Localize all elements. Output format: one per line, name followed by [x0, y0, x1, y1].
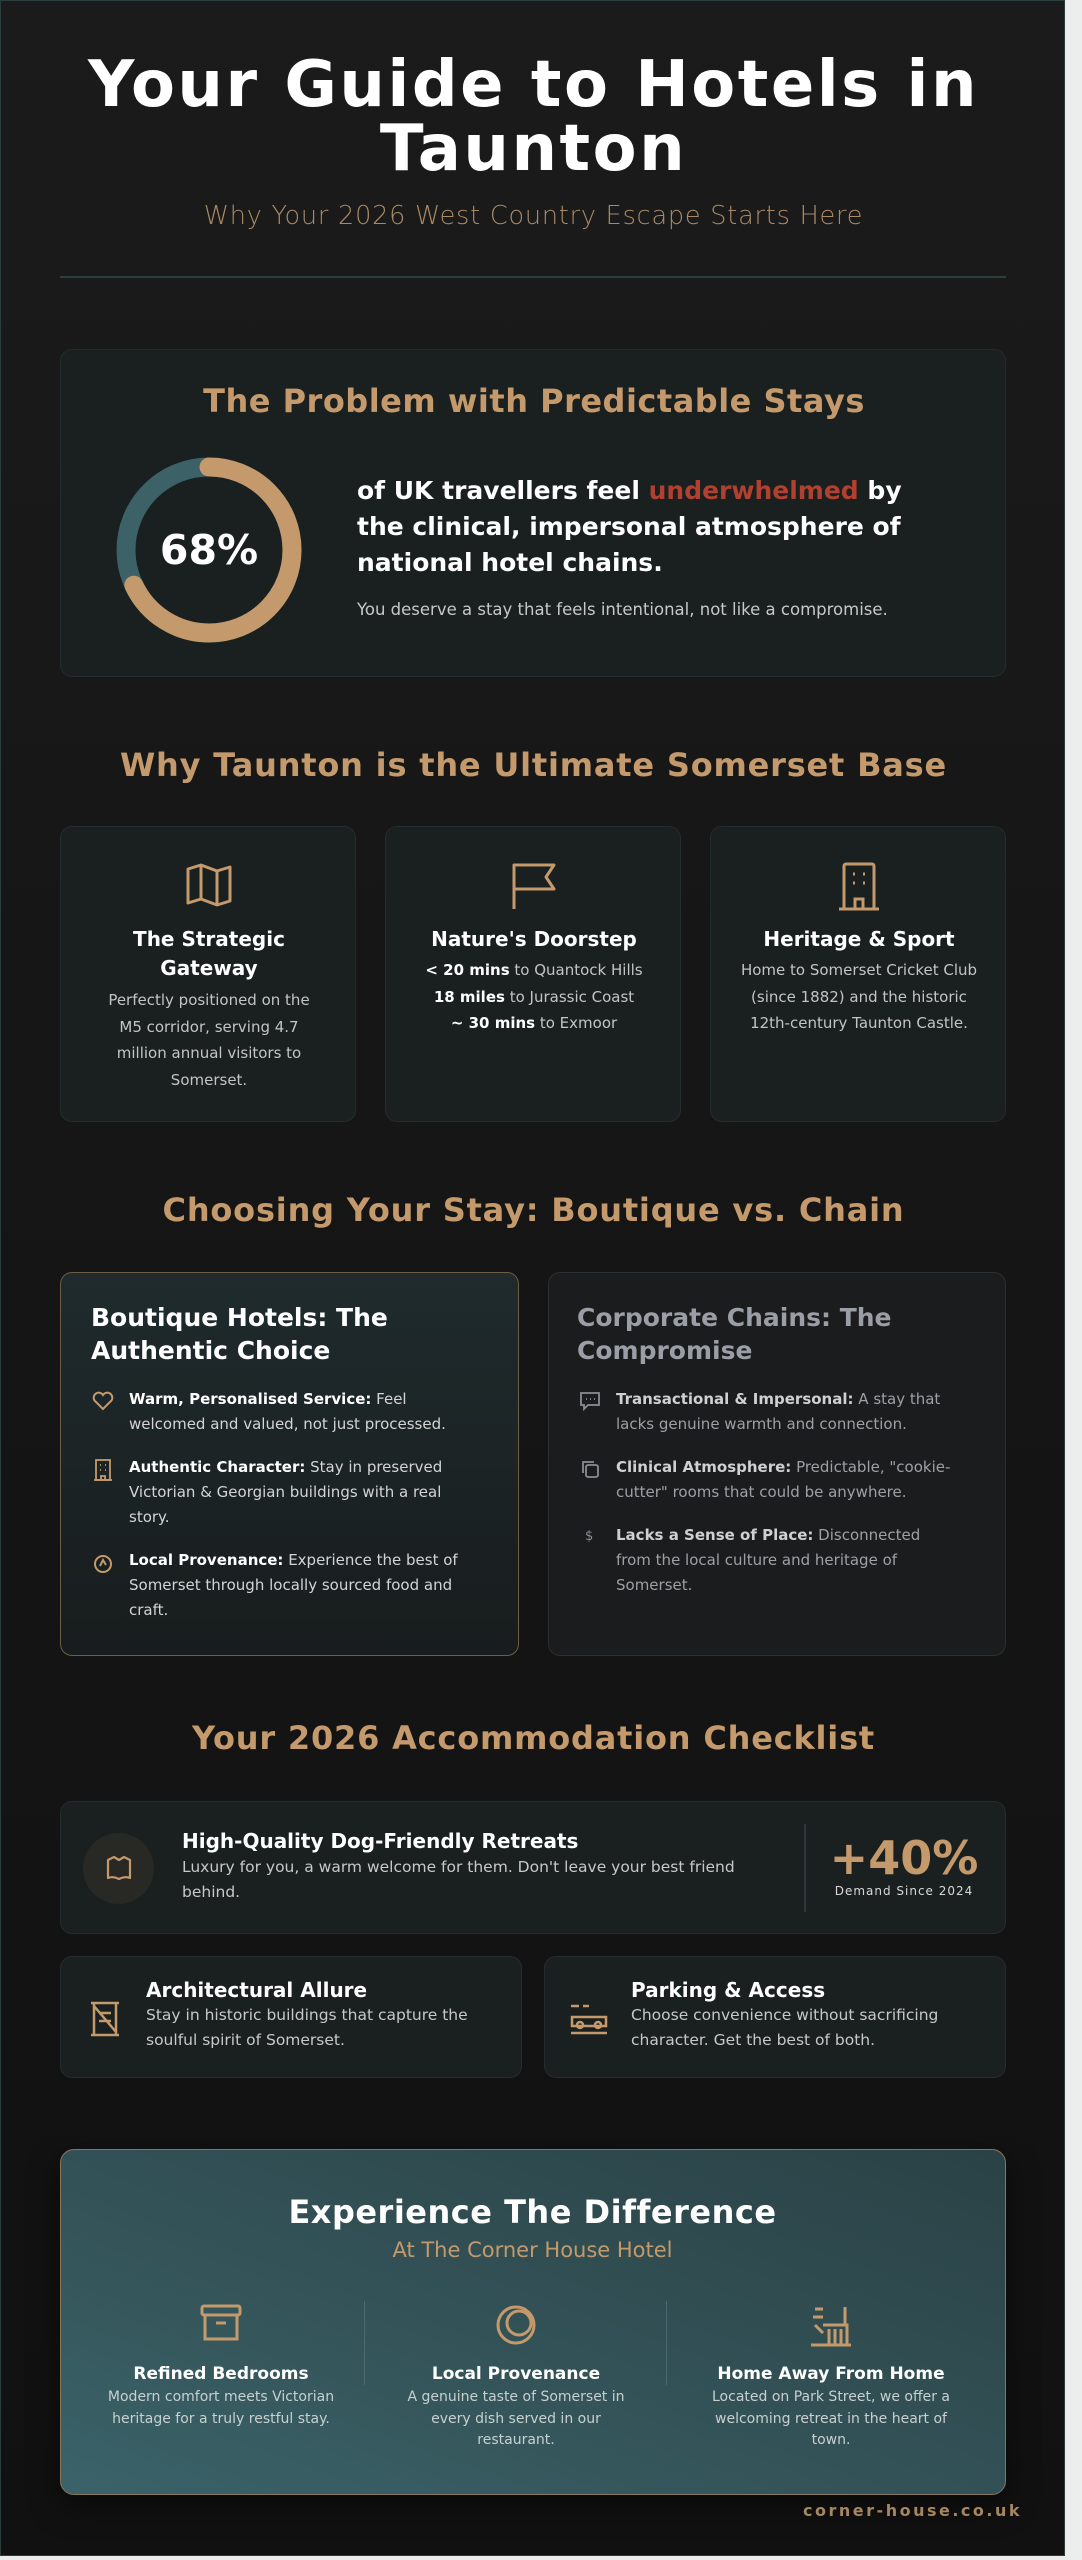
card: architectural allure	[60, 1956, 522, 2078]
text	[741, 927, 977, 1032]
column: local provenance: Local Provenance	[432, 2364, 600, 2384]
card: dog-friendly	[60, 1801, 1006, 1934]
column: home away from home	[712, 2307, 950, 2448]
heading: Experience The Difference	[288, 2193, 777, 2231]
text	[108, 927, 310, 1088]
column: refined bedrooms: Refined Bedrooms	[133, 2364, 309, 2384]
text: High-Quality Dog-Friendly Retreats	[182, 1829, 578, 1853]
heading: choosing your stay: Choosing Your Stay: Boutique vs. Chain	[163, 1191, 904, 1229]
text	[425, 927, 643, 1032]
column: refined bedrooms	[108, 2304, 334, 2426]
column: home away from home: Home Away From Home	[717, 2364, 945, 2384]
title	[87, 48, 979, 186]
title: Taunton	[380, 112, 687, 186]
column: local provenance: A genuine taste of Somerset in every dish served in our restaurant.	[407, 2389, 625, 2448]
column: refined bedrooms: Modern comfort meets Victorian heritage for a truly restful stay.	[108, 2389, 334, 2426]
icon: flag	[512, 864, 556, 909]
icon: book in circle	[83, 1833, 154, 1904]
heading: boutique	[91, 1303, 388, 1365]
subheading: At The Corner House Hotel	[392, 2238, 673, 2262]
item: transactional: Transactional & Impersonal: A stay that lacks genuine warmth and connection.	[616, 1390, 940, 1433]
heading: boutique: Authentic Choice	[91, 1336, 330, 1365]
statistic text: of UK travellers feel underwhelmed by the clinical, impersonal atmosphere of national hotel chains.	[357, 476, 902, 577]
donut chart 68%	[116, 458, 302, 642]
card: heritage & sport	[710, 826, 1006, 1122]
column: local provenance	[407, 2306, 625, 2448]
stat: +40%: Demand Since 2024	[835, 1884, 973, 1898]
text: Choose convenience without sacrificing character. Get the best of both.	[631, 2006, 938, 2049]
heading: problem: The Problem with Predictable Stays	[203, 382, 865, 420]
heading: chains: Compromise	[577, 1336, 752, 1365]
item: local provenance: Local Provenance: Experience the best of Somerset through locally sourced food and craft.	[129, 1551, 458, 1619]
text: Heritage & Sport	[763, 927, 955, 951]
column: home away from home: Located on Park Street, we offer a welcoming retreat in the heart of town.	[712, 2389, 950, 2448]
text: Architectural Allure	[146, 1978, 367, 2002]
panel: corporate chains	[548, 1272, 1006, 1656]
text	[631, 1978, 938, 2049]
text: Parking & Access	[631, 1978, 825, 2002]
text: 18 miles to Jurassic Coast	[434, 988, 634, 1006]
stat: +40%: +40%	[830, 1831, 978, 1885]
card: parking & access	[544, 1956, 1006, 2078]
donut chart 68%: 68%	[160, 526, 258, 574]
subtitle: Why Your 2026 West Country Escape Starts Here	[204, 201, 863, 231]
card: nature's doorstep	[385, 826, 681, 1122]
heading: why taunton: Why Taunton is the Ultimate Somerset Base	[120, 746, 947, 784]
text: ~ 30 mins to Exmoor	[451, 1014, 617, 1032]
item: sense of place: Lacks a Sense of Place: Disconnected from the local culture and heritage of Somerset.	[616, 1526, 920, 1594]
text: Luxury for you, a warm welcome for them. Don't leave your best friend behind.	[182, 1858, 735, 1901]
icon: map	[186, 864, 232, 906]
icon: car	[570, 2004, 608, 2034]
footer url: corner-house.co.uk	[803, 2501, 1022, 2520]
text: Home to Somerset Cricket Club (since 1882) and the historic 12th-century Taunton Castle.	[741, 961, 977, 1032]
text: Perfectly positioned on the M5 corridor, serving 4.7 million annual visitors to Somerset.	[108, 991, 310, 1088]
text: Gateway	[160, 956, 258, 980]
heading: chains	[577, 1303, 892, 1365]
text: Stay in historic buildings that capture the soulful spirit of Somerset.	[146, 2006, 468, 2049]
sub text: You deserve a stay that feels intentional, not like a compromise.	[357, 600, 888, 619]
card: strategic gateway	[60, 826, 356, 1122]
title: Your Guide to Hotels in	[88, 48, 979, 122]
text	[182, 1829, 735, 1901]
text: Nature's Doorstep	[431, 927, 637, 951]
text: < 20 mins to Quantock Hills	[425, 961, 643, 979]
text: The Strategic	[133, 927, 285, 951]
icon: building	[839, 862, 879, 910]
heading: chains: Corporate Chains: The	[577, 1303, 892, 1332]
item: authentic character: Authentic Character: Stay in preserved Victorian & Georgian buildings with a real story.	[129, 1458, 442, 1526]
item: sense of place: $	[585, 1529, 593, 1544]
panel: problem	[60, 349, 1006, 677]
heading: boutique: Boutique Hotels: The	[91, 1303, 388, 1332]
text	[146, 1978, 468, 2049]
icon: scroll	[91, 2002, 119, 2036]
panel: boutique hotels	[60, 1272, 519, 1656]
item: clinical: Clinical Atmosphere: Predictable, "cookie-cutter" rooms that could be anywhere.	[616, 1458, 950, 1501]
item: warm service: Warm, Personalised Service: Feel welcomed and valued, not just processed.	[129, 1390, 446, 1433]
heading: checklist: Your 2026 Accommodation Checklist	[192, 1719, 875, 1757]
panel: experience the difference	[60, 2149, 1006, 2495]
